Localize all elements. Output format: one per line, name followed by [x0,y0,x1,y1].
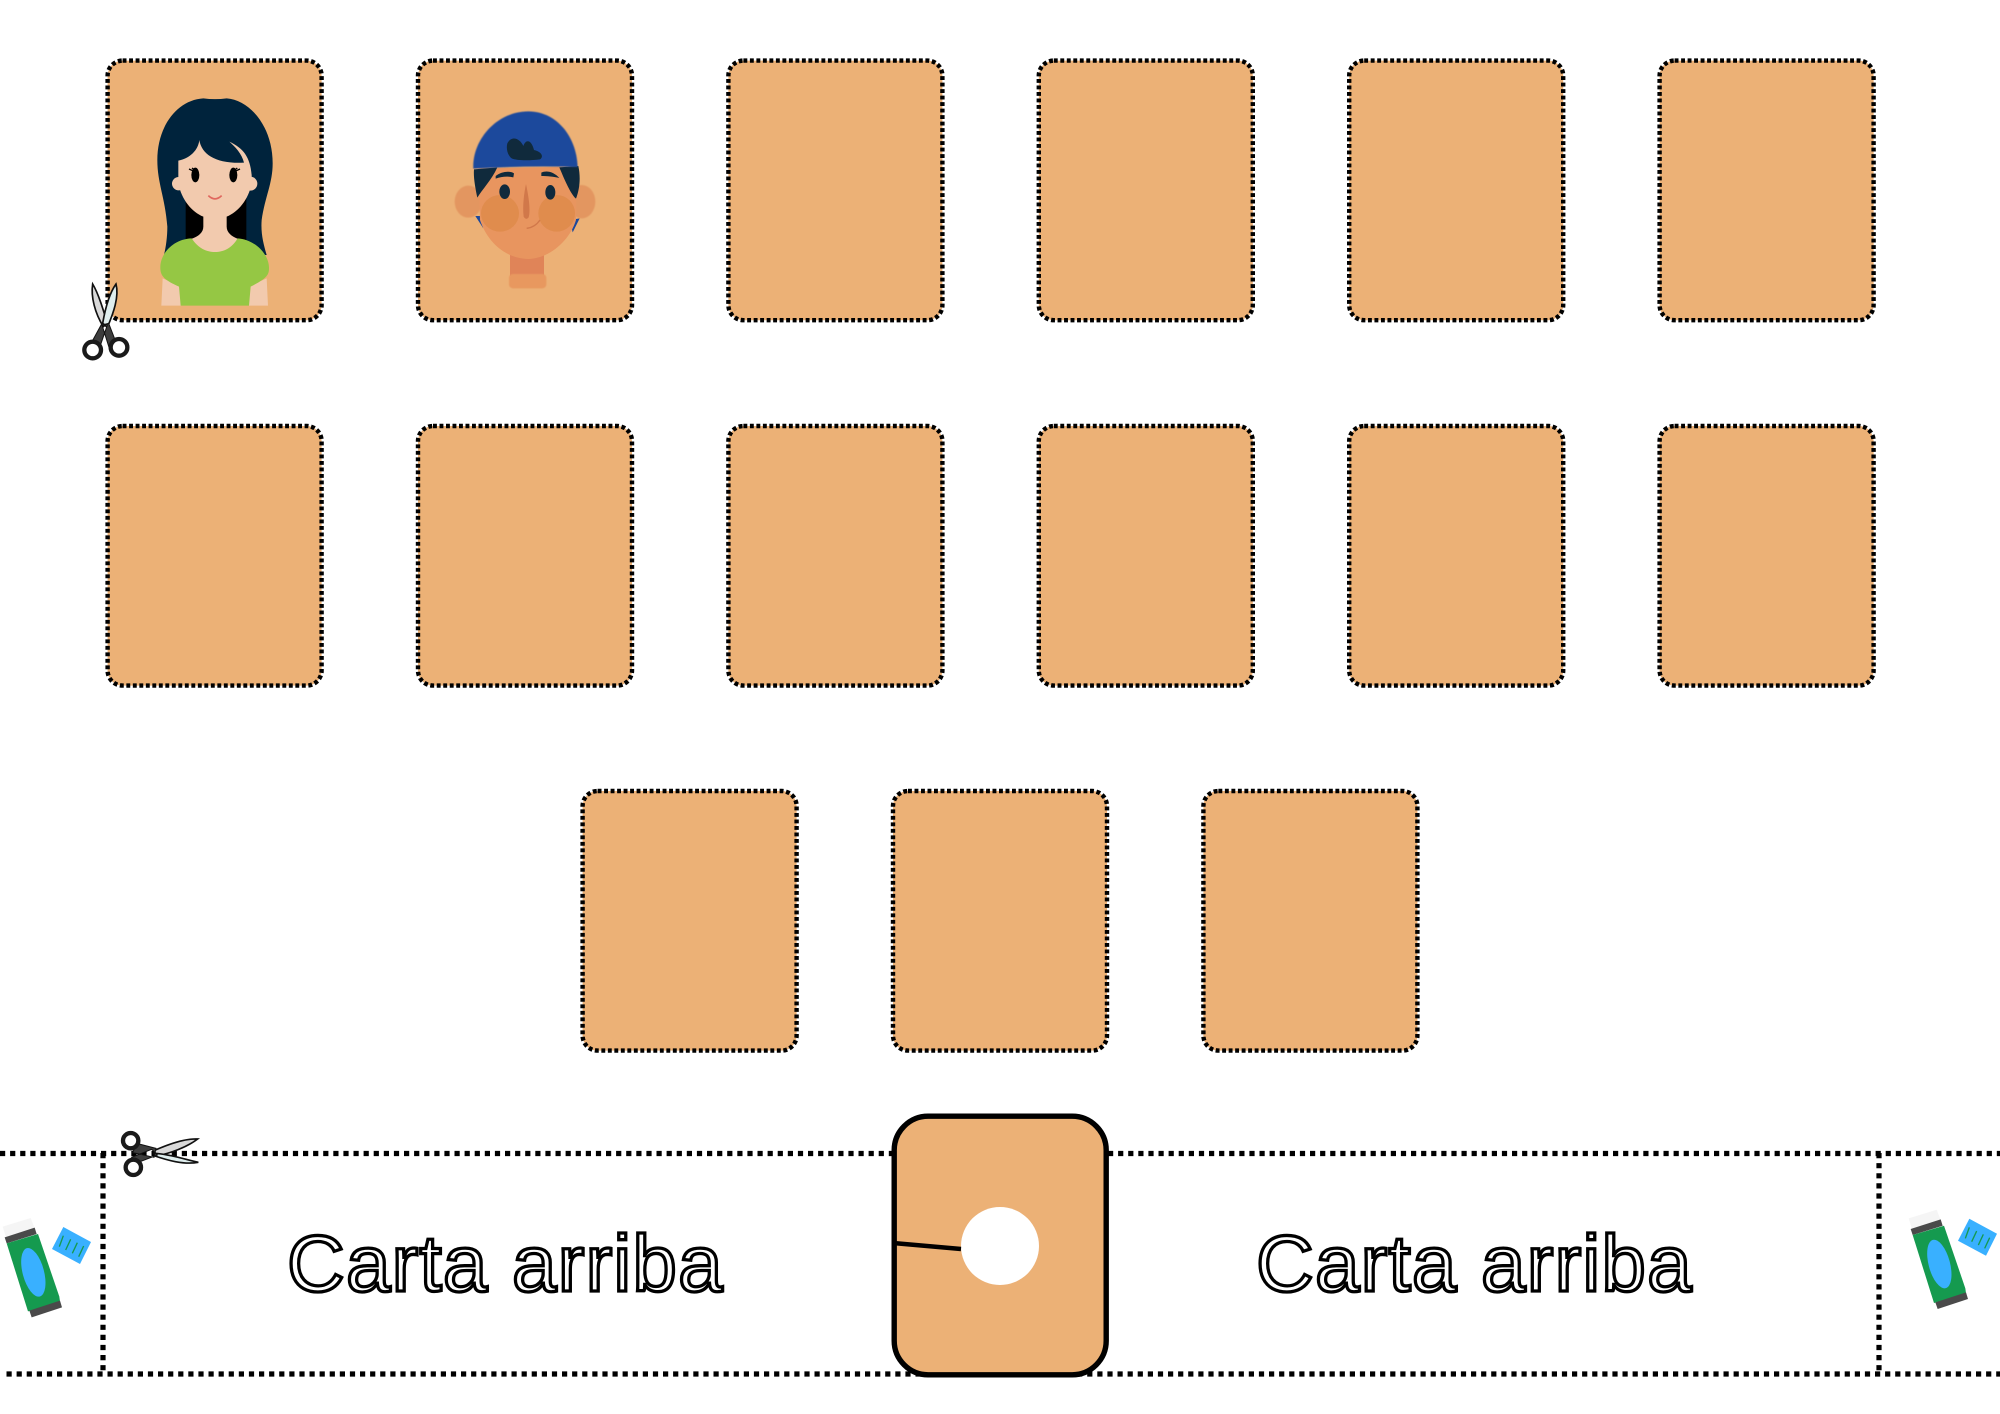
centre tab with hole and slit [893,1116,1106,1375]
card row 2, card 6 [1660,426,1874,686]
card row 1, card 2 [418,61,632,320]
label: Carta arriba right: Carta arriba [1256,1219,1693,1308]
card row 1, card 6 [1660,61,1874,320]
scissors icon at first card [84,284,127,358]
cut line: top right [1108,1151,2000,1156]
cut line: right fold [1876,1153,1882,1374]
label: Carta arriba left: Carta arriba [287,1219,724,1308]
icon: glue stick right [1909,1210,1997,1309]
card row 3, card 2 [893,791,1107,1051]
card row 2, card 1 [108,426,322,686]
card row 1, card 1 [108,61,322,320]
card row 1, card 3 [728,61,942,320]
cut line: left fold [100,1153,106,1374]
card row 3, card 1 [583,791,797,1051]
cut line: top left [0,1151,892,1156]
icon: boy with blue backwards cap [455,111,595,288]
card row 2, card 5 [1349,426,1563,686]
card row 2, card 2 [418,426,632,686]
scissors icon on the strip [123,1133,198,1175]
card row 2, card 3 [728,426,942,686]
card row 2, card 4 [1039,426,1253,686]
icon: girl with long dark hair and green shirt [157,98,273,306]
cut line: bottom [6,1371,2000,1377]
card row 3, card 3 [1203,791,1417,1051]
icon: glue stick left [3,1218,91,1317]
card row 1, card 4 [1039,61,1253,320]
card row 1, card 5 [1349,61,1563,320]
